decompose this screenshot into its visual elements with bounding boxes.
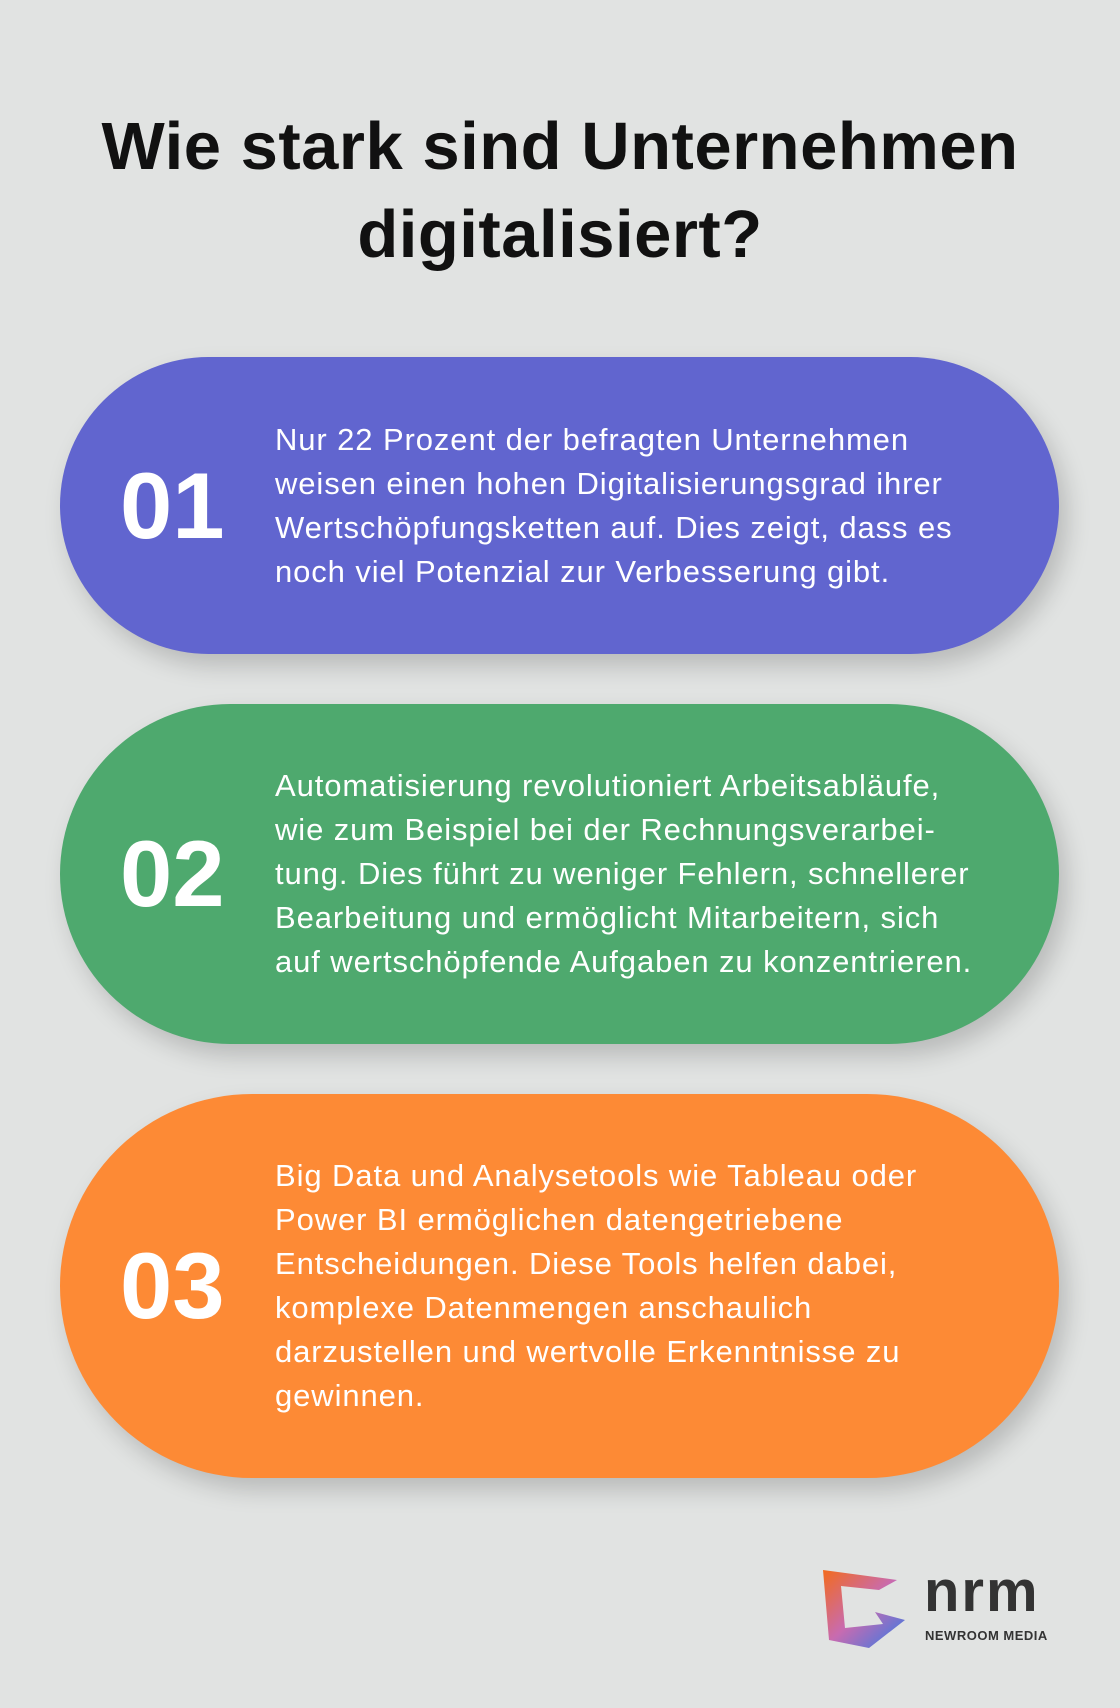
logo: NEWROOM MEDIA — [925, 1628, 1048, 1643]
logo — [823, 1559, 1048, 1648]
text 02: tung. Dies führt zu weniger Fehlern, schnellerer — [275, 856, 970, 891]
text 02 — [275, 768, 972, 979]
text 01: noch viel Potenzial zur Verbesserung gibt. — [275, 554, 890, 588]
title — [101, 109, 1019, 272]
text 03: komplexe Datenmengen anschaulich — [275, 1290, 812, 1325]
text 01: Nur 22 Prozent der befragten Unternehmen — [275, 422, 909, 456]
text 03 — [275, 1158, 917, 1413]
text 03: Power BI ermöglichen datengetriebene — [275, 1202, 843, 1237]
text 03: Big Data und Analysetools wie Tableau oder — [275, 1158, 917, 1193]
text 02: auf wertschöpfende Aufgaben zu konzentrieren. — [275, 944, 972, 979]
text 03: darzustellen und wertvolle Erkenntnisse zu — [275, 1334, 900, 1369]
logo text: nrm — [924, 1559, 1040, 1624]
title: Wie stark sind Unternehmen — [101, 109, 1019, 184]
text 01: weisen einen hohen Digitalisierungsgrad ihrer — [275, 466, 943, 500]
text 02: Bearbeitung und ermöglicht Mitarbeitern, sich — [275, 900, 939, 935]
text 02: wie zum Beispiel bei der Rechnungsverarbei- — [275, 812, 936, 847]
text 03: gewinnen. — [275, 1378, 424, 1413]
number 02: 02 — [120, 821, 225, 926]
text 01: Wertschöpfungsketten auf. Dies zeigt, dass es — [275, 510, 952, 544]
number 01: 01 — [120, 452, 225, 558]
number 03: 03 — [120, 1233, 225, 1338]
text 03: Entscheidungen. Diese Tools helfen dabei, — [275, 1246, 897, 1281]
text 01 — [275, 422, 952, 588]
title: digitalisiert? — [357, 197, 763, 272]
panel: 02 — [60, 704, 1059, 1044]
panel: 03 — [60, 1094, 1059, 1478]
text 02: Automatisierung revolutioniert Arbeitsabläufe, — [275, 768, 940, 803]
icon: logo mark — [823, 1570, 905, 1648]
panel: 01 — [60, 357, 1059, 654]
